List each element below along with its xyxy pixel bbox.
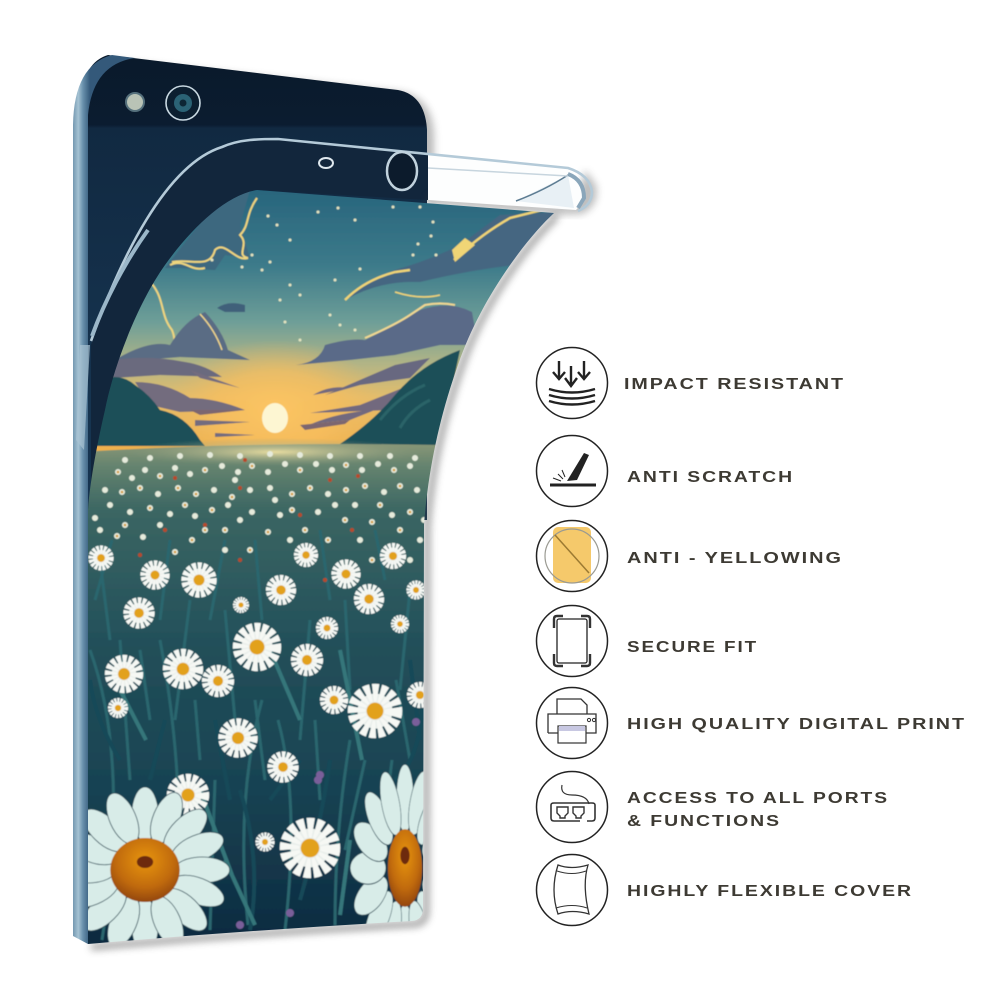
label: ANTI SCRATCH <box>627 469 794 486</box>
label second line: & FUNCTIONS <box>627 813 781 830</box>
low left clouds <box>113 358 222 378</box>
feature: impact resistant <box>536 348 845 418</box>
label: HIGH QUALITY DIGITAL PRINT <box>627 716 966 733</box>
distant white flowers <box>95 454 424 560</box>
distant flower centres <box>117 465 410 560</box>
case flash ring <box>319 158 333 168</box>
label: IMPACT RESISTANT <box>624 376 845 393</box>
art shadow <box>91 216 557 947</box>
icon: yellowed case crossed out <box>536 520 608 592</box>
feature: secure fit <box>536 606 758 676</box>
feature: anti scratch <box>536 436 794 506</box>
icon: impact arrows <box>536 348 608 418</box>
feature: flexible cover <box>536 854 913 926</box>
feature: anti yellowing <box>536 520 843 592</box>
sun <box>262 403 288 433</box>
sky specks <box>212 207 436 340</box>
meadow <box>88 443 436 944</box>
sky <box>96 190 554 452</box>
case camera ring <box>387 152 417 190</box>
phone body <box>80 55 427 520</box>
big daisy right <box>350 764 424 924</box>
labels: ACCESS TO ALL PORTS <box>627 790 889 807</box>
feature: high quality digital print <box>536 688 966 758</box>
icon: blade scratching surface <box>536 436 608 506</box>
case white opening <box>428 153 585 210</box>
label: SECURE FIT <box>627 639 758 656</box>
camera flash <box>126 93 144 111</box>
distant clouds bright <box>190 410 350 430</box>
icon: printer <box>536 688 608 758</box>
grass blades <box>90 530 423 940</box>
phone side frame <box>73 55 135 944</box>
red poppies <box>140 460 358 580</box>
case interior over phone <box>91 139 428 500</box>
small sky cloud <box>217 303 245 312</box>
case rim <box>91 139 592 341</box>
printed artwork <box>88 190 554 944</box>
horizon band <box>150 439 390 464</box>
label: HIGHLY FLEXIBLE COVER <box>627 883 913 900</box>
low right clouds <box>325 358 430 395</box>
case side detail <box>76 345 90 450</box>
left sky cloud <box>118 312 250 362</box>
big daisy left <box>88 786 230 942</box>
case corner shadow <box>428 170 597 215</box>
case side button <box>92 230 148 336</box>
right trees <box>340 350 460 446</box>
rear camera <box>166 86 200 120</box>
daisies mid field <box>92 547 429 868</box>
icon: ports <box>536 772 608 842</box>
cloud gold edges left <box>152 198 257 352</box>
upper right cloud <box>345 212 560 300</box>
label: ANTI - YELLOWING <box>627 550 843 567</box>
icon: flexible cover <box>536 854 608 926</box>
feature: access to ports <box>536 772 889 842</box>
upper left cloud <box>165 190 250 270</box>
left trees <box>95 377 205 446</box>
icon: phone with bumpers <box>536 606 608 676</box>
phone with clear case <box>60 55 597 972</box>
phone shadow <box>100 60 434 200</box>
purple clover <box>235 717 421 930</box>
sun glow <box>190 344 359 442</box>
mid right cloud <box>296 305 478 365</box>
